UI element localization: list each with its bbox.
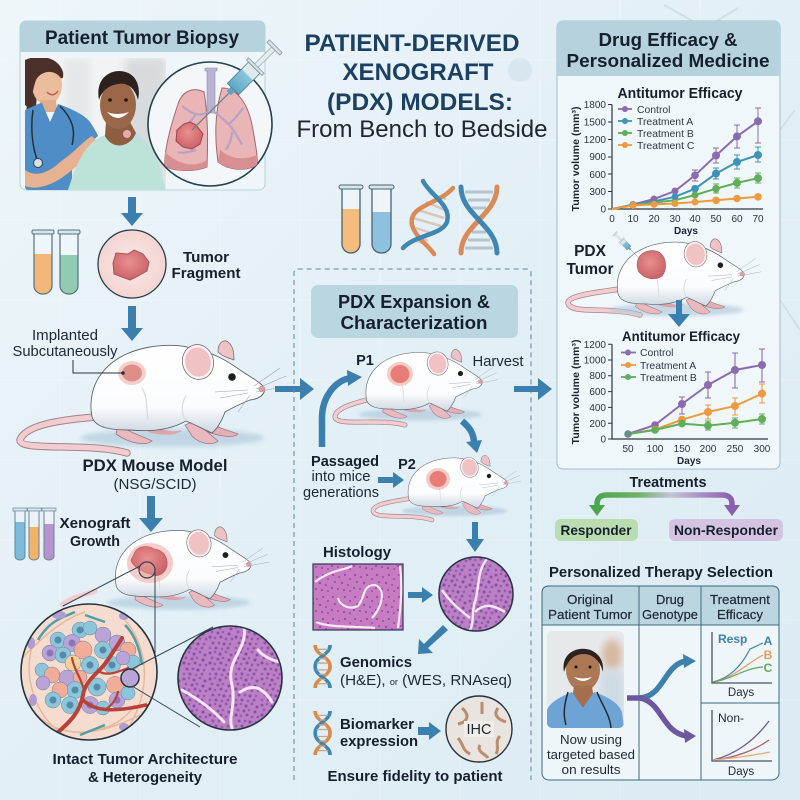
chart: antitumor efficacy top: Antitumor Efficacy <box>618 86 742 102</box>
chart: antitumor efficacy top: Days <box>674 226 698 237</box>
label: implanted subcutaneously <box>12 327 118 360</box>
badge: responder <box>555 519 638 541</box>
chart: antitumor efficacy bottom: Days <box>677 456 701 467</box>
chart: antitumor efficacy top: 600 <box>589 170 606 181</box>
caption: intact tumor architecture: & Heterogeneity <box>88 769 203 786</box>
label: xenograft growth: Xenograft <box>60 515 130 532</box>
text: biomarker expression <box>340 716 418 750</box>
label: passaged into mice generations: into mice <box>312 469 370 485</box>
legend: top chart: Control <box>637 105 670 116</box>
panel heading: PDX expansion <box>311 285 518 338</box>
chart: antitumor efficacy top: Tumor volume (mm³) <box>571 106 582 212</box>
arrow: slide to zoom <box>408 587 433 603</box>
label: PDX tumor: Tumor <box>566 261 614 278</box>
connector lines: mouse to cell zoom <box>63 566 155 664</box>
label: PDX mouse model: PDX Mouse Model <box>82 456 228 475</box>
connector lines: cell zoom to histology <box>130 627 213 727</box>
title: From Bench to Bedside <box>296 116 548 143</box>
label: passaged into mice generations <box>303 454 379 501</box>
lung magnifier circle <box>148 62 272 186</box>
panel: patient tumor biopsy <box>20 21 284 190</box>
icon: small syringe <box>612 231 646 265</box>
chart: non-responder: Non- <box>718 711 744 725</box>
chart: antitumor efficacy top: 0 <box>600 204 606 216</box>
chart: antitumor efficacy bottom: 1000 <box>584 356 606 366</box>
label: harvest: Harvest <box>472 354 524 370</box>
chart: antitumor efficacy bottom <box>571 329 771 467</box>
label: PDX mouse model <box>82 456 228 493</box>
chart: antitumor efficacy top: 1200 <box>584 135 606 146</box>
panel header: drug efficacy: Personalized Medicine <box>566 50 770 71</box>
panel header: biopsy <box>20 21 265 52</box>
icon: tumor fragment <box>98 230 166 298</box>
histology circle: zoom <box>439 557 513 631</box>
icon: syringe <box>184 38 284 138</box>
mouse: PDX mouse model <box>20 341 288 453</box>
table header: Original <box>567 592 613 607</box>
table header: Drug <box>656 592 684 607</box>
chart: antitumor efficacy top: 20 <box>648 214 660 225</box>
panel heading: PDX expansion: Characterization <box>340 312 488 333</box>
label: xenograft growth <box>60 515 130 550</box>
series: treatment C <box>612 194 761 209</box>
badge: responder: Responder <box>560 522 632 538</box>
caption: intact tumor architecture <box>52 751 237 786</box>
chart: antitumor efficacy bottom: Antitumor Efficacy <box>622 329 740 344</box>
label: implanted subcutaneously: Subcutaneously <box>12 343 118 360</box>
legend: top chart <box>618 105 695 152</box>
icon: DNA biomarker <box>315 711 330 755</box>
caption: ensure fidelity: Ensure fidelity to patient <box>328 768 502 785</box>
chart: antitumor efficacy bottom: 150 <box>674 444 691 455</box>
text: genomics: Genomics <box>340 654 412 671</box>
tumor architecture circle <box>20 604 157 740</box>
chart: responder: B <box>764 648 773 662</box>
chart: antitumor efficacy bottom: 100 <box>647 444 664 455</box>
legend: bottom chart: Treatment A <box>640 361 696 372</box>
chart: non-responder: Days <box>728 766 754 778</box>
mouse: P1 <box>335 349 498 425</box>
mouse: P2 <box>373 455 521 520</box>
text: genomics: (H&E), or (WES, RNAseq) <box>340 672 512 689</box>
arrow: mouse to chart <box>668 300 690 327</box>
table header: Patient Tumor <box>548 607 633 622</box>
chart: antitumor efficacy top: 1800 <box>584 100 606 111</box>
chart: responder: A <box>764 634 773 648</box>
legend: top chart: Treatment A <box>637 117 693 128</box>
chart: antitumor efficacy top: 300 <box>589 187 606 198</box>
chart: antitumor efficacy top: 60 <box>731 214 743 225</box>
table header: Efficacy <box>717 607 763 622</box>
legend: bottom chart: Control <box>640 348 674 359</box>
chart: responder: Days <box>728 687 754 699</box>
series: treatment A bottom <box>628 384 766 434</box>
icon: DNA genomics <box>315 645 330 688</box>
arrow: biopsy to fragment <box>121 197 143 226</box>
panel header: drug efficacy: Drug Efficacy & <box>598 29 738 50</box>
label: tumor fragment: Fragment <box>172 265 240 282</box>
icons: test tubes and DNA <box>339 181 497 254</box>
legend: top chart: Treatment B <box>637 129 694 140</box>
series: control bottom <box>628 349 766 434</box>
photo: clinician <box>547 631 624 728</box>
label: P1: P1 <box>356 353 374 369</box>
histology circle: tumor section <box>178 626 282 730</box>
arrow: P2 to histology <box>466 522 484 552</box>
text: now using targeted: Now using <box>560 732 622 747</box>
arrow: to xenograft <box>139 496 163 532</box>
label: xenograft growth: Growth <box>70 533 120 550</box>
title: PATIENT-DERIVED <box>304 30 520 57</box>
chart: antitumor efficacy top: 50 <box>710 214 722 225</box>
text: genomics <box>340 654 512 689</box>
panel: PDX expansion and characterization <box>294 269 531 785</box>
chart: antitumor efficacy bottom: 200 <box>700 444 717 455</box>
panel header: drug efficacy <box>557 21 780 76</box>
chart: antitumor efficacy top: 1500 <box>584 118 606 128</box>
arrow: fragment to mouse <box>121 306 143 341</box>
label: PDX tumor <box>566 243 614 278</box>
chart: responder <box>712 632 773 699</box>
IHC circle: IHC <box>467 722 491 738</box>
chart: responder: Resp <box>718 632 747 646</box>
chart: antitumor efficacy bottom: 200 <box>589 419 606 430</box>
arrow: to responder chart <box>640 654 696 698</box>
leader line: implant site <box>73 360 125 375</box>
arrow: to non-responder chart <box>627 698 696 743</box>
series: treatment A <box>612 147 762 209</box>
mouse: PDX tumor <box>568 239 761 316</box>
chart: antitumor efficacy top: 0 <box>609 214 615 225</box>
chart: antitumor efficacy top: 40 <box>689 214 701 225</box>
table header: Genotype <box>642 607 698 622</box>
arrow: mouse to expansion <box>275 378 314 400</box>
icon: three test tubes <box>13 508 56 560</box>
label: PDX mouse model: (NSG/SCID) <box>114 476 197 493</box>
panel: therapy selection table <box>542 586 779 780</box>
arrow: zoom to genomics <box>418 625 448 654</box>
chart: non-responder <box>712 710 772 778</box>
icon: two test tubes <box>32 230 80 294</box>
legend: bottom chart <box>621 348 697 384</box>
title <box>296 30 548 143</box>
table header <box>542 586 779 625</box>
chart: antitumor efficacy bottom: 400 <box>589 403 606 414</box>
badge: non-responder <box>669 519 783 541</box>
arrow: generations to P2 <box>378 472 404 488</box>
arrow: treatment split <box>589 495 740 516</box>
series: treatment B bottom <box>625 414 766 437</box>
label: passaged into mice generations: Passaged <box>311 454 379 470</box>
text: now using targeted <box>547 732 635 777</box>
histology slide <box>313 564 403 630</box>
title: (PDX) MODELS: <box>327 89 513 116</box>
label: implanted subcutaneously: Implanted <box>32 327 98 344</box>
chart: antitumor efficacy bottom: 50 <box>622 444 634 455</box>
chart: antitumor efficacy bottom: 0 <box>600 434 606 446</box>
label: tumor fragment <box>172 249 240 282</box>
series: treatment B <box>612 173 762 209</box>
photo: nurse and patient <box>25 57 166 190</box>
chart: antitumor efficacy bottom: 800 <box>589 371 606 382</box>
series: control <box>612 108 762 209</box>
badge: non-responder: Non-Responder <box>674 522 779 538</box>
text: biomarker expression: Biomarker <box>340 716 414 733</box>
arrow: curved passage <box>322 370 362 447</box>
heading: personalized therapy selection: Personalized Therapy Selection <box>549 564 773 581</box>
label: histology: Histology <box>323 544 392 561</box>
chart: responder: C <box>764 661 773 675</box>
chart: antitumor efficacy bottom: 300 <box>754 444 771 455</box>
label: P2: P2 <box>398 457 416 473</box>
arrow: biomarker to IHC <box>418 722 441 740</box>
label: tumor fragment: Tumor <box>183 249 229 266</box>
chart: antitumor efficacy bottom: 250 <box>727 444 744 455</box>
text: now using targeted: on results <box>562 762 621 777</box>
label: passaged into mice generations: generations <box>303 485 379 501</box>
chart: antitumor efficacy top: 30 <box>669 214 681 225</box>
label: PDX tumor: PDX <box>574 243 607 260</box>
chart: antitumor efficacy bottom: 1200 <box>584 340 606 351</box>
text: biomarker expression: expression <box>340 733 418 750</box>
arrow: expansion to efficacy <box>514 378 552 400</box>
heading: patient tumor biopsy: Patient Tumor Biopsy <box>45 28 239 49</box>
chart: antitumor efficacy top: 70 <box>752 214 764 225</box>
chart: antitumor efficacy bottom: Tumor volume (mm³) <box>571 340 582 444</box>
chart: antitumor efficacy bottom: 600 <box>589 387 606 398</box>
label: treatments: Treatments <box>630 475 707 491</box>
legend: bottom chart: Treatment B <box>640 373 697 384</box>
caption: intact tumor architecture: Intact Tumor Architecture <box>52 751 237 768</box>
title: XENOGRAFT <box>342 59 494 86</box>
IHC circle <box>446 696 512 762</box>
panel heading: PDX expansion: PDX Expansion & <box>338 292 490 312</box>
arrow: P1 to P2 <box>462 421 482 453</box>
chart: antitumor efficacy top <box>571 86 764 237</box>
legend: top chart: Treatment C <box>637 141 695 152</box>
table header: Treatment <box>710 592 770 607</box>
text: now using targeted: targeted based <box>547 747 635 762</box>
mouse: xenograft growth <box>62 527 269 610</box>
panel: drug efficacy and personalized medicine <box>557 21 780 469</box>
chart: antitumor efficacy top: 10 <box>627 214 639 225</box>
chart: antitumor efficacy top: 900 <box>589 152 606 163</box>
